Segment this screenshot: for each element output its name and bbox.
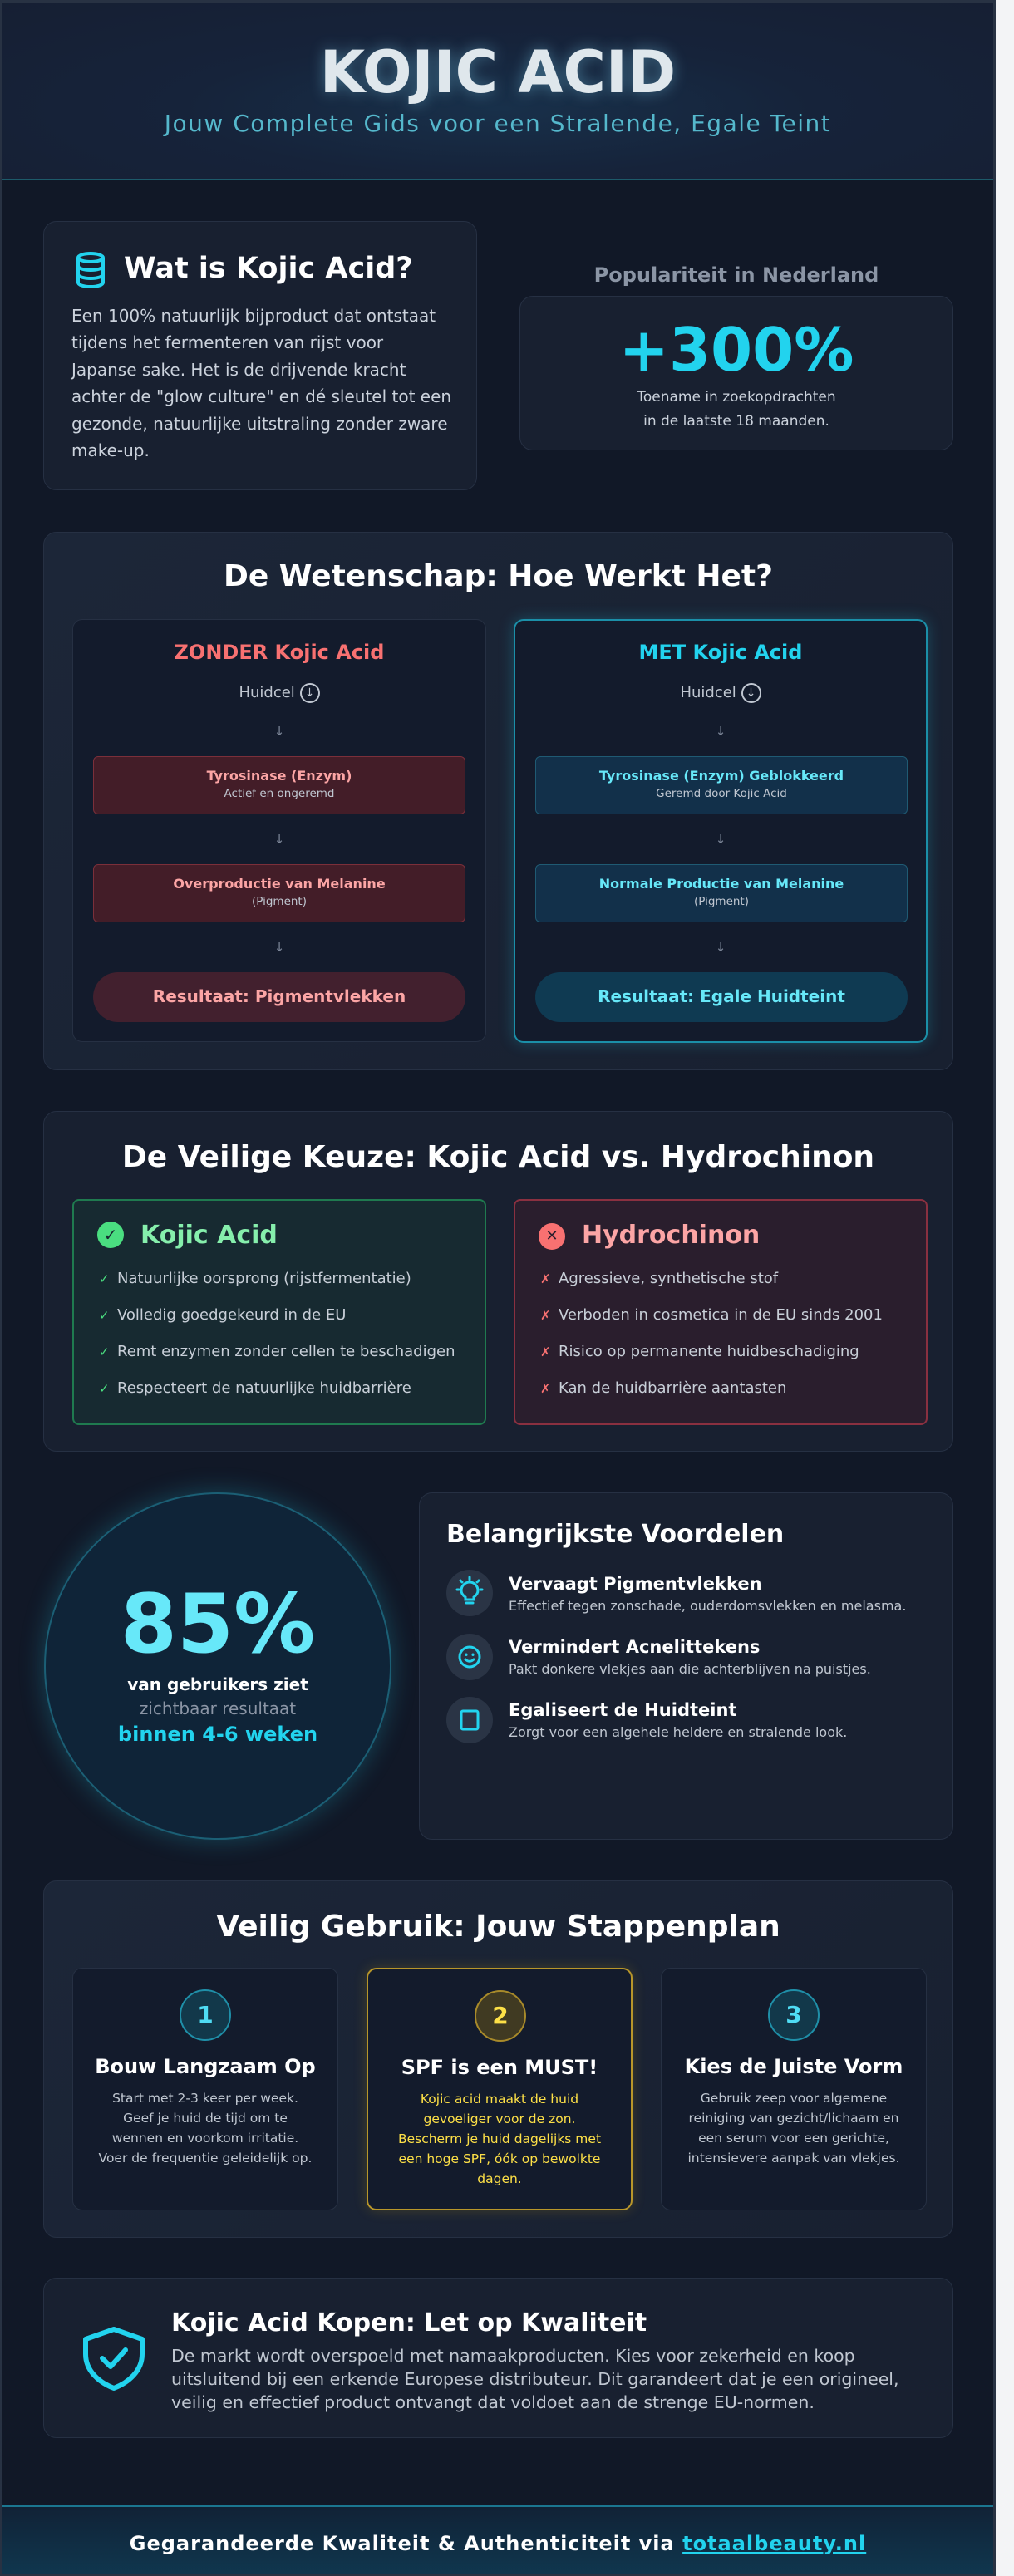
- panel: veilige keuze: [43, 1111, 953, 1452]
- step 1: 1: [197, 2001, 214, 2028]
- list: Agressieve, synthetische stof: [559, 1270, 778, 1287]
- stat circle 85%: [44, 1492, 391, 1840]
- header: [2, 3, 993, 180]
- arrow: ↓: [274, 724, 284, 739]
- heading: Kojic Acid Kopen: Let op Kwaliteit: [171, 2308, 647, 2338]
- heading: De Veilige Keuze: Kojic Acid vs. Hydrochinon: [122, 1140, 874, 1174]
- step 3: intensievere aanpak van vlekjes.: [687, 2151, 899, 2166]
- box normale: (Pigment): [694, 895, 749, 908]
- step 2: Bescherm je huid dagelijks met: [398, 2131, 601, 2146]
- icon: smile: [446, 1634, 493, 1680]
- pros heading: ✓: [104, 1225, 117, 1245]
- arrow: ↓: [274, 832, 284, 847]
- benefit 1: Vervaagt Pigmentvlekken: [509, 1574, 762, 1594]
- box tyrosinase: Actief en ongeremd: [224, 787, 334, 800]
- arrow: ↓: [274, 940, 284, 955]
- stat circle 85%: binnen 4-6 weken: [118, 1723, 317, 1746]
- result pill: [535, 972, 908, 1022]
- panel: voordelen: Effectief tegen zonschade, ouderdomsvlekken en melasma.: [509, 1598, 906, 1614]
- panel: kojic pros: Volledig goedgekeurd in de EU: [117, 1306, 346, 1324]
- panel: kojic pros: ✓: [99, 1308, 110, 1323]
- text block: tijdens het fermenteren van rijst voor: [71, 332, 383, 352]
- caption: van gebruikers ziet: [127, 1674, 308, 1694]
- arrow: ↓: [716, 940, 726, 955]
- huidcel: ↓: [305, 686, 314, 700]
- text block: achter de "glow culture" en dé sleutel tot een: [71, 386, 451, 406]
- panel: wat is kojic acid: [43, 221, 477, 490]
- text block: Japanse sake. Het is de drijvende kracht: [71, 360, 406, 380]
- panel: voordelen: Pakt donkere vlekjes aan die achterblijven na puistjes.: [509, 1661, 871, 1677]
- subheading met: MET Kojic Acid: [639, 641, 802, 664]
- panel: zonder: [72, 619, 486, 1042]
- huidcel: ↓: [746, 686, 756, 700]
- panel: hydrochinon cons: Kan de huidbarrière aantasten: [559, 1379, 786, 1397]
- step 1: Start met 2-3 keer per week.: [112, 2091, 298, 2106]
- box blocked: [535, 756, 908, 814]
- panel: hydrochinon cons: Risico op permanente huidbeschadiging: [559, 1343, 859, 1360]
- box tyrosinase: [93, 756, 465, 814]
- huidcel: [680, 683, 761, 703]
- panel: kojic pros: Respecteert de natuurlijke huidbarrière: [117, 1379, 411, 1397]
- panel: hydrochinon cons: ✗: [540, 1345, 551, 1359]
- benefit 2: Vermindert Acnelittekens: [509, 1637, 760, 1657]
- panel: voordelen: Zorgt voor een algehele heldere en stralende look.: [509, 1724, 847, 1740]
- heading: Veilig Gebruik: Jouw Stappenplan: [216, 1910, 780, 1944]
- huidcel: Huidcel: [239, 684, 295, 701]
- step 1: wennen en voorkom irritatie.: [112, 2131, 298, 2146]
- panel: kojic pros: Remt enzymen zonder cellen te beschadigen: [117, 1343, 455, 1360]
- caption: [637, 389, 836, 430]
- huidcel: [239, 683, 320, 703]
- panel: hydrochinon cons: Verboden in cosmetica in de EU sinds 2001: [559, 1306, 883, 1324]
- step 1: Geef je huid de tijd om te: [123, 2111, 288, 2126]
- caption: in de laatste 18 maanden.: [643, 413, 829, 430]
- panel: stat 300%: [519, 296, 953, 450]
- stat circle 85%: zichtbaar resultaat: [140, 1698, 296, 1718]
- panel: hydrochinon cons: ✗: [540, 1381, 551, 1396]
- step 3: reiniging van gezicht/lichaam en: [689, 2111, 898, 2126]
- icon: square: [446, 1697, 493, 1743]
- step 2: [367, 1968, 633, 2210]
- heading: Wat is Kojic Acid?: [124, 252, 413, 285]
- step 3: 3: [785, 2001, 802, 2028]
- result pill: [93, 972, 465, 1022]
- box melanine: Overproductie van Melanine: [173, 876, 386, 892]
- step 3: Kies de Juiste Vorm: [685, 2055, 903, 2078]
- box normale: Normale Productie van Melanine: [599, 876, 844, 892]
- list: ✗: [540, 1271, 551, 1286]
- footer: [2, 2505, 993, 2576]
- panel: stappenplan: [43, 1880, 953, 2238]
- panel: voordelen: [419, 1492, 953, 1840]
- icon: database: [76, 252, 105, 288]
- text block: Een 100% natuurlijk bijproduct dat ontstaat: [71, 306, 436, 326]
- panel: hydrochinon cons: ✗: [540, 1308, 551, 1323]
- heading: Belangrijkste Voordelen: [446, 1520, 784, 1549]
- step 2: een hoge SPF, óók op bewolkte: [399, 2151, 600, 2166]
- panel: wetenschap: [43, 532, 953, 1070]
- heading: populariteit: Populariteit in Nederland: [594, 263, 879, 287]
- step 3: Gebruik zeep voor algemene: [701, 2091, 887, 2106]
- cons heading: Hydrochinon: [582, 1221, 760, 1250]
- text block: make-up.: [71, 440, 150, 460]
- box melanine: (Pigment): [252, 895, 307, 908]
- panel: met: [514, 619, 928, 1043]
- panel: hydrochinon cons: [514, 1199, 928, 1425]
- cons heading: ✕: [545, 1227, 559, 1245]
- panel: kojic pros: [72, 1199, 486, 1425]
- list: ✓: [99, 1271, 110, 1286]
- title: KOJIC ACID: [320, 38, 676, 106]
- footer text: Gegarandeerde Kwaliteit & Authenticiteit via totaalbeauty.nl: [130, 2532, 866, 2555]
- step 2: Kojic acid maakt de huid: [421, 2092, 578, 2107]
- step 2: dagen.: [477, 2171, 522, 2186]
- icon: bulb: [446, 1570, 493, 1616]
- step 3: [661, 1968, 927, 2210]
- arrow: ↓: [716, 724, 726, 739]
- box normale: [535, 864, 908, 922]
- text block: gezonde, natuurlijke uitstraling zonder zware: [71, 414, 448, 434]
- box blocked: Geremd door Kojic Acid: [656, 787, 787, 800]
- huidcel: Huidcel: [680, 684, 736, 701]
- subtitle: Jouw Complete Gids voor een Stralende, Egale Teint: [165, 110, 831, 137]
- big number: 85%: [121, 1577, 315, 1672]
- step 1: Voer de frequentie geleidelijk op.: [99, 2151, 312, 2166]
- step 1: Bouw Langzaam Op: [95, 2055, 316, 2078]
- result pill: Resultaat: Egale Huidteint: [598, 986, 845, 1006]
- stat number: +300%: [619, 315, 854, 385]
- subheading zonder: ZONDER Kojic Acid: [175, 641, 384, 664]
- step 2: SPF is een MUST!: [401, 2056, 598, 2079]
- box tyrosinase: Tyrosinase (Enzym): [207, 768, 352, 784]
- result pill: Resultaat: Pigmentvlekken: [153, 986, 406, 1006]
- text block: De markt wordt overspoeld met namaakproducten. Kies voor zekerheid en koop uitsluitend bij een erkende Europese distributeur. Dit garandeert dat je een origineel, veilig en effectief product ontvangt dat voldoet aan de strenge EU-normen.: [171, 2346, 899, 2412]
- box blocked: Tyrosinase (Enzym) Geblokkeerd: [599, 768, 844, 784]
- panel: kwaliteit: [43, 2278, 953, 2438]
- panel: kojic pros: ✓: [99, 1345, 110, 1359]
- step 3: een serum voor een gerichte,: [698, 2131, 889, 2146]
- step 2: gevoeliger voor de zon.: [424, 2111, 575, 2126]
- step 1: [72, 1968, 338, 2210]
- icon: shield: [83, 2327, 145, 2391]
- benefit 3: Egaliseert de Huidteint: [509, 1700, 736, 1720]
- step 2: 2: [492, 2002, 509, 2029]
- caption: Toename in zoekopdrachten: [637, 389, 836, 406]
- text block: [70, 306, 451, 460]
- list: Natuurlijke oorsprong (rijstfermentatie): [117, 1270, 411, 1287]
- pros heading: Kojic Acid: [140, 1221, 278, 1250]
- panel: kojic pros: ✓: [99, 1381, 110, 1396]
- arrow: ↓: [716, 832, 726, 847]
- box melanine: [93, 864, 465, 922]
- heading: De Wetenschap: Hoe Werkt Het?: [224, 559, 773, 593]
